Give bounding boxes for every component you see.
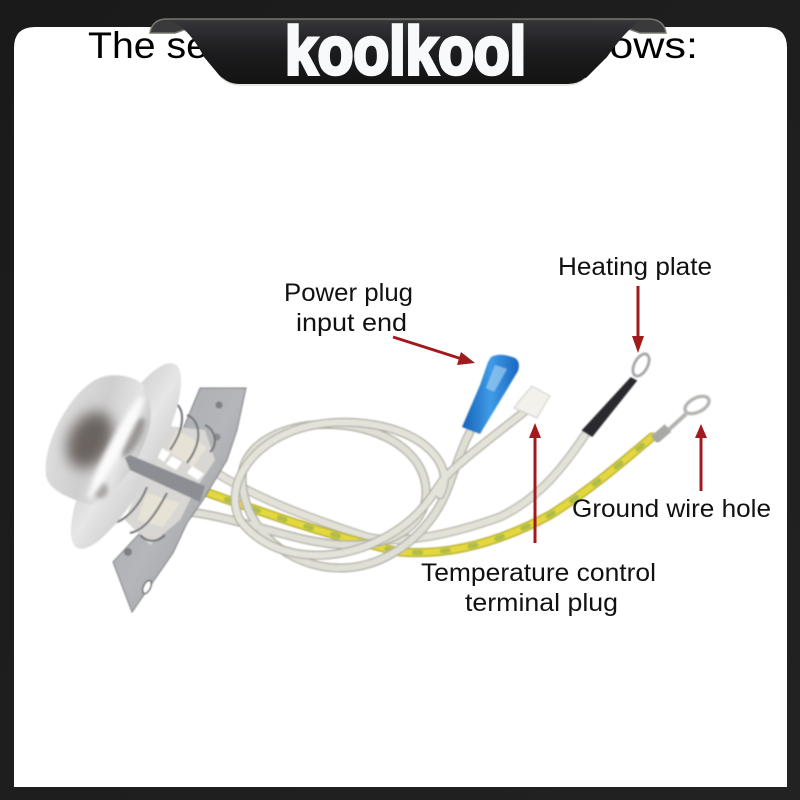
- label: temperature control: [421, 559, 656, 617]
- label: temperature control: Temperature control: [421, 559, 656, 587]
- wire to heating plate: [212, 432, 587, 540]
- wire to temperature plug: [235, 412, 524, 555]
- brand ribbon: [150, 13, 666, 89]
- ring terminal: heating plate: [584, 351, 652, 435]
- brand name: koolkool: [285, 13, 526, 89]
- arrow: temperature plug: [529, 423, 541, 543]
- white connector: [514, 386, 550, 418]
- label: power plug: [284, 279, 413, 337]
- cap shadow: [57, 404, 123, 476]
- cap dome: [46, 375, 151, 505]
- thermostat body: [46, 351, 246, 612]
- heading text: llows:: [590, 25, 698, 66]
- label: heating plate: Heating plate: [558, 253, 712, 281]
- ceramic core and spring windows: [125, 425, 215, 545]
- arrow: heating plate: [632, 286, 644, 353]
- bracket bar: [125, 455, 205, 502]
- label: temperature control: terminal plug: [465, 589, 618, 617]
- heading text: The se: [88, 25, 208, 66]
- heading text: [88, 25, 698, 66]
- label: power plug: input end: [296, 309, 407, 337]
- springs: [112, 403, 215, 541]
- mounting plate: [113, 388, 246, 612]
- blue terminal: [462, 355, 519, 434]
- ring terminal: ground: [654, 393, 712, 440]
- flange: [52, 351, 200, 561]
- label: ground wire hole: Ground wire hole: [572, 495, 771, 523]
- label: power plug: Power plug: [284, 279, 413, 307]
- arrow: power plug: [393, 337, 475, 365]
- arrow: ground wire: [695, 424, 707, 491]
- product photo: wires: [190, 412, 652, 568]
- wire to blue plug: [190, 424, 470, 568]
- yellow ground wire: [200, 437, 652, 553]
